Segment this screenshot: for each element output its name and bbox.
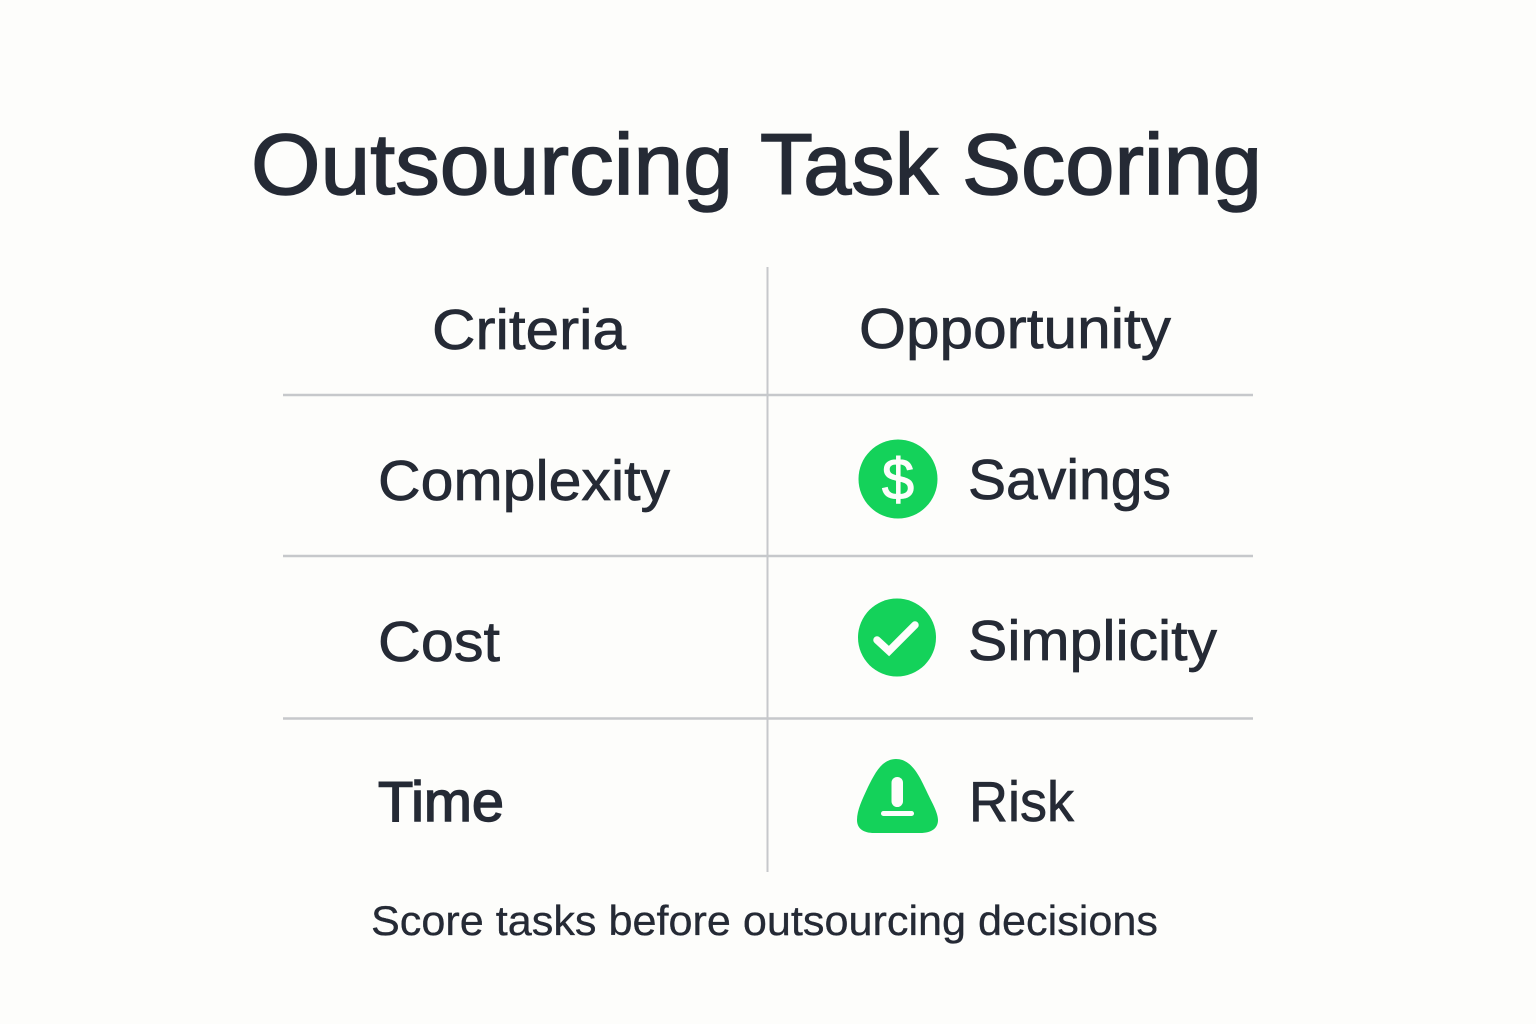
row value: savings: Savings — [968, 448, 1171, 512]
icon: warning — [857, 759, 938, 833]
row value: simplicity: Simplicity — [968, 609, 1218, 673]
caption: Score tasks before outsourcing decisions — [371, 897, 1158, 944]
header: opportunity: Opportunity — [859, 297, 1172, 361]
table — [283, 267, 1253, 872]
row label: time: Time — [378, 770, 504, 834]
icon: check — [858, 598, 936, 676]
title: Scoring — [962, 117, 1262, 213]
icon: dollar — [858, 440, 938, 518]
header: criteria: Criteria — [432, 298, 626, 362]
title: Outsourcing — [251, 117, 733, 213]
row label: complexity: Complexity — [378, 449, 671, 513]
icon: dollar: $ — [882, 447, 914, 512]
row value: risk: Risk — [969, 770, 1074, 834]
title: Task — [760, 117, 939, 213]
row label: cost: Cost — [378, 610, 500, 674]
title — [251, 117, 1262, 213]
